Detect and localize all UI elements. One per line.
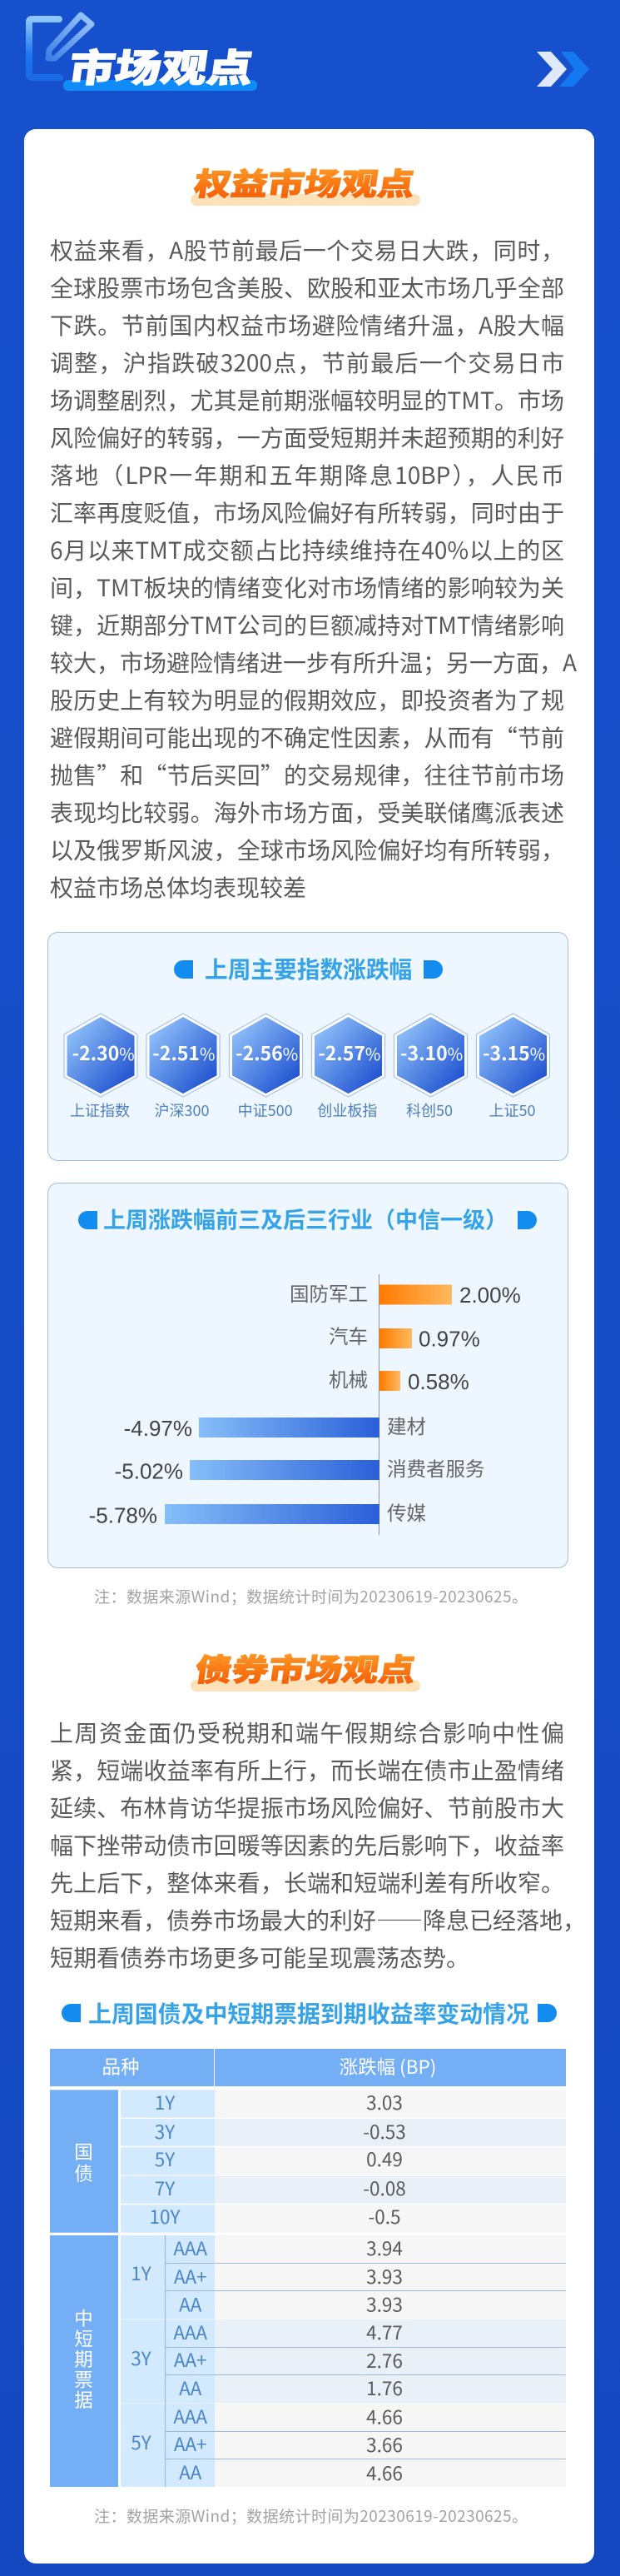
text block: equity commentary: 全球股票市场包含美股、欧股和亚太市场几乎全部 — [50, 271, 564, 304]
group: medium and short-term notes: 票 — [74, 2365, 93, 2392]
text block: equity commentary: 抛售”和“节后买回”的交易规律，往往节前市场 — [50, 758, 564, 791]
text block: equity commentary: 以及俄罗斯风波，全球市场风险偏好均有所转弱， — [50, 833, 564, 866]
index: 创业板指: 创业板指 — [317, 1099, 377, 1121]
text block: bond commentary: 短期看债券市场更多可能呈现震荡态势。 — [50, 1941, 469, 1974]
table header row: 品种 — [102, 2053, 140, 2080]
title: 市场观点: 市场观点 — [66, 37, 257, 93]
text block: equity commentary: 场调整剧烈，尤其是前期涨幅较明显的TMT。市场 — [50, 383, 564, 416]
group: treasury bonds: 1Y — [155, 2089, 175, 2115]
bar: 机械: 机械 — [329, 1364, 368, 1393]
bar: 消费者服务: -5.02% — [115, 1459, 183, 1484]
text block: equity commentary: 避假期间可能出现的不确定性因素，从而有“节前 — [50, 720, 564, 754]
group: medium and short-term notes: AA+ — [174, 2263, 207, 2290]
text block: equity commentary: 6月以来TMT成交额占比持续维持在40%以上的区 — [50, 533, 564, 566]
group: treasury bonds: 国 — [74, 2138, 93, 2165]
bar: 机械 — [329, 1364, 469, 1394]
group: medium and short-term notes: 3.93 — [366, 2290, 403, 2317]
group: medium and short-term notes: AA — [179, 2290, 202, 2317]
group: treasury bonds: -0.53 — [363, 2118, 406, 2145]
title underline — [63, 80, 257, 91]
group: medium and short-term notes: AA+ — [174, 2430, 207, 2457]
index: 沪深300 — [146, 1014, 220, 1121]
panel heading: index moves: 上周主要指数涨跌幅 — [205, 951, 412, 984]
index: 科创50 — [394, 1014, 468, 1121]
panel: top and bottom industries — [48, 1183, 568, 1567]
icon: pencil and bracket — [29, 15, 92, 77]
panel: weekly index moves — [48, 933, 568, 1161]
text block: equity commentary: 权益来看，A股节前最后一个交易日大跌，同时， — [50, 233, 564, 267]
group: treasury bonds: 0.49 — [366, 2145, 403, 2172]
index: 中证500: -2.56% — [236, 1038, 298, 1066]
index: 上证50: -3.15% — [483, 1038, 545, 1066]
text block: equity commentary: 间，TMT板块的情绪变化对市场情绪的影响较为关 — [50, 571, 564, 604]
index: 创业板指: -2.57% — [318, 1038, 380, 1066]
footnote: equity data source: 注：数据来源Wind；数据统计时间为20230619-20230625。 — [94, 1585, 528, 1607]
index: 上证50 — [476, 1014, 549, 1121]
group: medium and short-term notes: 中 — [74, 2304, 93, 2331]
bar: 机械: 0.58% — [408, 1369, 469, 1394]
bar: 汽车: 汽车 — [329, 1321, 368, 1349]
bar: 传媒: -5.78% — [89, 1502, 157, 1527]
text block: bond commentary: 短期来看，债券市场最大的利好——降息已经落地， — [50, 1902, 586, 1936]
text block: bond commentary: 上周资金面仍受税期和端午假期综合影响中性偏 — [50, 1716, 564, 1749]
text block: equity commentary: 调整，沪指跌破3200点，节前最后一个交易日市 — [50, 346, 564, 379]
text block: equity commentary: 风险偏好的转弱，一方面受短期并未超预期的利好 — [50, 421, 564, 454]
text block: equity commentary: 下跌。节前国内权益市场避险情绪升温，A股大幅 — [50, 308, 564, 341]
group: treasury bonds: 债 — [74, 2160, 93, 2186]
text block: equity commentary: 权益市场总体均表现较差 — [50, 870, 306, 904]
bar: 消费者服务 — [115, 1453, 484, 1484]
group: medium and short-term notes: AAA — [173, 2319, 207, 2345]
group: treasury bonds: 7Y — [155, 2175, 175, 2201]
group: medium and short-term notes: AAA — [173, 2403, 207, 2429]
bar: 汽车: 0.97% — [419, 1326, 480, 1351]
table heading: yield changes: 上周国债及中短期票据到期收益率变动情况 — [88, 1996, 529, 2030]
group: medium and short-term notes: 4.66 — [366, 2404, 403, 2430]
bar: 传媒 — [89, 1497, 426, 1527]
group: medium and short-term notes: 3.93 — [366, 2263, 403, 2290]
text block: equity commentary: 表现均比较弱。海外市场方面，受美联储鹰派表述 — [50, 795, 564, 829]
header: title banner — [29, 15, 589, 93]
index: 上证指数 — [64, 1014, 137, 1121]
group: medium and short-term notes — [50, 2235, 566, 2487]
group: medium and short-term notes: 3Y — [131, 2344, 151, 2371]
group: medium and short-term notes: 1.76 — [366, 2374, 403, 2401]
bar chart: industry moves — [89, 1274, 521, 1535]
bar: 消费者服务: 消费者服务 — [387, 1453, 484, 1482]
group: medium and short-term notes: 5Y — [131, 2429, 151, 2455]
group: medium and short-term notes: 4.77 — [366, 2319, 403, 2345]
table header row — [50, 2049, 566, 2086]
group: treasury bonds: -0.5 — [368, 2203, 401, 2230]
text block: equity commentary: 股历史上有较为明显的假期效应，即投资者为了规 — [50, 683, 564, 716]
text block: bond commentary: 先上后下，整体来看，长端和短端利差有所收窄。 — [50, 1866, 564, 1899]
group: medium and short-term notes: AA+ — [174, 2346, 207, 2373]
group: treasury bonds: 3Y — [155, 2118, 175, 2145]
text block: bond commentary: 幅下挫带动债市回暖等因素的先后影响下，收益率 — [50, 1827, 564, 1861]
group: treasury bonds: 3.03 — [366, 2089, 403, 2115]
index: 科创50: 科创50 — [406, 1099, 453, 1121]
index: 上证50: 上证50 — [489, 1099, 535, 1121]
text block: equity commentary: 落地（LPR一年期和五年期降息10BP），人民币 — [50, 458, 564, 491]
index: 中证500 — [230, 1014, 303, 1121]
bar: 汽车 — [329, 1321, 480, 1351]
index: 沪深300: -2.51% — [152, 1038, 215, 1066]
bar: 建材 — [124, 1411, 426, 1441]
group: treasury bonds: 10Y — [150, 2203, 181, 2230]
footnote: bond data source: 注：数据来源Wind；数据统计时间为20230619-20230625。 — [94, 2504, 528, 2527]
bar: 国防军工: 国防军工 — [290, 1278, 368, 1307]
index: 中证500: 中证500 — [238, 1099, 293, 1121]
group: treasury bonds: 5Y — [155, 2145, 175, 2172]
group: medium and short-term notes: AA — [179, 2459, 202, 2485]
index: 上证指数: -2.30% — [72, 1038, 135, 1066]
text block: equity commentary: 较大，市场避险情绪进一步有所升温；另一方面，A — [50, 645, 577, 679]
group: medium and short-term notes: 据 — [74, 2386, 93, 2413]
heading: equity market view: 权益市场观点 — [191, 159, 418, 204]
group: treasury bonds: -0.08 — [363, 2175, 406, 2201]
index: 科创50: -3.10% — [400, 1038, 463, 1066]
bar: 建材: 建材 — [387, 1411, 426, 1439]
group: treasury bonds — [50, 2089, 566, 2233]
text block: bond commentary: 延续、布林肯访华提振市场风险偏好、节前股市大 — [50, 1791, 564, 1824]
heading: bond market view: 债券市场观点 — [192, 1645, 419, 1690]
group: medium and short-term notes: 3.94 — [366, 2235, 403, 2261]
table header row: 涨跌幅 (BP) — [340, 2053, 436, 2080]
text block: bond commentary: 紧，短端收益率有所上行，而长端在债市止盈情绪 — [50, 1752, 564, 1786]
text block: bond commentary — [50, 1716, 586, 1974]
bar: 国防军工: 2.00% — [459, 1283, 521, 1308]
group: medium and short-term notes: 3.66 — [366, 2431, 403, 2458]
group: medium and short-term notes: 2.76 — [366, 2347, 403, 2374]
group: medium and short-term notes: 1Y — [131, 2260, 151, 2286]
panel heading: industries: 上周涨跌幅前三及后三行业（中信一级） — [103, 1203, 508, 1234]
text block: equity commentary: 汇率再度贬值，市场风险偏好有所转弱，同时由于 — [50, 496, 564, 529]
group: medium and short-term notes: 短 — [74, 2325, 93, 2352]
bar: 建材: -4.97% — [124, 1416, 192, 1441]
index: 沪深300: 沪深300 — [155, 1099, 209, 1121]
group: medium and short-term notes: 4.66 — [366, 2459, 403, 2486]
bar: 国防军工 — [290, 1278, 521, 1308]
icon: double chevron — [537, 52, 589, 87]
index: 上证指数: 上证指数 — [70, 1099, 130, 1121]
table: yield changes — [50, 2049, 566, 2487]
text block: equity commentary: 键，近期部分TMT公司的巨额减持对TMT情绪影响 — [50, 608, 564, 641]
group: medium and short-term notes: AA — [179, 2374, 202, 2401]
index: 创业板指 — [311, 1014, 384, 1121]
text block: equity commentary — [50, 233, 577, 904]
group: medium and short-term notes: AAA — [173, 2235, 207, 2261]
bar: 传媒: 传媒 — [387, 1497, 426, 1526]
group: medium and short-term notes: 期 — [74, 2345, 93, 2372]
